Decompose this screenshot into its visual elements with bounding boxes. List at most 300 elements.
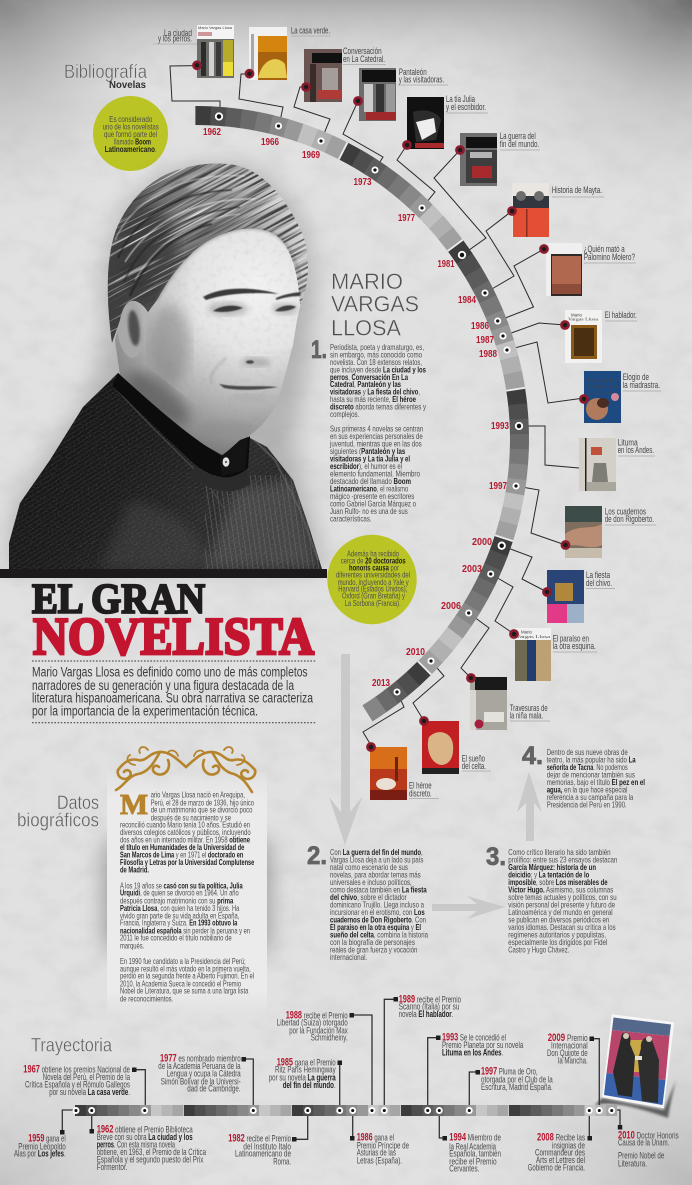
entry: 1962: Breve con su obra La ciudad y los	[97, 1132, 193, 1142]
entry: 1962: 1962 obtiene el Premio Biblioteca	[97, 1124, 193, 1136]
entry: 1989: Scanno (Italia) por su	[399, 1001, 459, 1011]
book: ¿Quién mató a Palomino Molero?	[540, 243, 636, 296]
text block 1: biography as novelist: visitadoras y La tía Julia y el	[330, 454, 410, 464]
book: El héroe discreto: discreto.	[409, 789, 432, 799]
book: El héroe discreto	[367, 743, 439, 800]
biography text: de Madrid.	[120, 865, 149, 875]
book: El hablador: Mario	[571, 312, 583, 318]
biography text	[120, 790, 254, 1003]
book: La guerra del fin del mundo: fin del mundo.	[500, 139, 539, 149]
intro paragraph: literatura hispanoamericana. Su obra narrativa se caracteriza	[32, 691, 313, 706]
arc timeline year labels: 2013	[372, 678, 390, 689]
entry: 2008: 2008 Recibe las	[537, 1132, 585, 1144]
text block 2: La guerra del fin del mundo: internacional.	[330, 952, 367, 962]
book: Historia de Mayta	[508, 183, 604, 237]
portrait photo of Mario Vargas Llosa	[0, 154, 330, 580]
callout: honoris causa doctorates	[327, 535, 417, 624]
text block 4: theatre and memoirs: memorias, bajo el título El pez en el	[547, 777, 645, 787]
entry: 1994: recibe el Premio	[449, 1156, 497, 1166]
arc timeline year labels: 1969	[302, 150, 320, 161]
text block 2: La guerra del fin del mundo: con la biografía de personajes	[330, 937, 415, 947]
entry: 1962	[97, 1124, 206, 1172]
text block 1: biography as novelist: en sus experiencias personales de	[330, 431, 423, 441]
book: ¿Quién mató a Palomino Molero?: ¿Quién mató a	[584, 244, 625, 254]
entry: 2009: Internacional	[551, 1041, 588, 1051]
entry: 1988: por la Fundación Max	[289, 1025, 348, 1035]
trayectoria entries	[14, 993, 679, 1174]
text block 1: biography as novelist: Latinoamericano, el realismo	[330, 484, 408, 494]
entry: 1977	[158, 1053, 241, 1094]
book: La guerra del fin del mundo	[456, 131, 540, 186]
text block 3: critic and essayist: 3.	[486, 843, 506, 871]
entry: 1997: 1997 Pluma de Oro,	[481, 1066, 538, 1078]
book: La ciudad y los perros: La ciudad	[164, 28, 192, 38]
arc timeline year labels: 1984	[458, 295, 476, 306]
ear	[114, 297, 146, 359]
text block 2: La guerra del fin del mundo: como destaca también en La fiesta	[330, 884, 427, 894]
photo halo shadow	[6, 165, 324, 569]
text block 4: theatre and memoirs: señorita de Tacna. No podemos	[547, 762, 628, 772]
book: La ciudad y los perros: y los perros.	[158, 34, 192, 44]
biography text: Filosofía y Letras por la Universidad Complutense	[120, 857, 254, 867]
entry: 1993	[442, 1032, 523, 1058]
callout: Boom Latinoamericano: que formó parte del	[104, 129, 157, 139]
callout: honoris causa doctorates: Oxford (Gran Bretaña) y	[342, 591, 405, 601]
book: Elogio de la madrastra: la madrastra.	[623, 380, 660, 390]
text block 1: biography as novelist: visitadoras y La fiesta del chivo,	[330, 387, 420, 397]
entry: 2010: Premio Nobel de	[618, 1151, 664, 1161]
arc timeline year labels: 1962	[203, 127, 221, 138]
text block 4: theatre and memoirs: dejar de mencionar también sus	[547, 770, 635, 780]
book: Historia de Mayta: Historia de Mayta.	[552, 185, 602, 195]
callout: honoris causa doctorates: diferentes universidades del	[336, 570, 410, 580]
book: La guerra del fin del mundo: La guerra del	[500, 131, 536, 141]
book: La tía Julia y el escribidor	[403, 94, 488, 149]
entry: 1988: 1988 recibe el Premio	[286, 1009, 348, 1021]
biography text: reconcilió cuando Mario tenía 10 años. Estudió en	[120, 820, 250, 830]
novel connector lines	[170, 66, 584, 747]
arc timeline band	[0, 0, 653, 896]
heading: Datos biográficos: Datos	[57, 793, 99, 814]
biography text: 2011 le fue concedido el título nobiliario de	[120, 933, 232, 943]
heading: Bibliografía: Novelas	[109, 80, 146, 91]
entry: 1985: 1985 gana el Premio	[277, 1056, 336, 1068]
entry: 2008: Commandeur des	[535, 1148, 585, 1158]
arc timeline year labels: 1981	[438, 259, 455, 270]
arc timeline year labels: 1973	[354, 177, 372, 188]
biography text: dos años en un internado militar. En 1958 obtiene	[120, 835, 250, 845]
entry: 2008: Gobierno de Francia.	[528, 1163, 585, 1173]
entry: 1959: 1959 gana el	[28, 1133, 66, 1145]
entry: 1986: 1986 gana el	[357, 1132, 394, 1144]
book: El sueño del celta	[420, 717, 491, 774]
text block 1: biography as novelist: Catedral, Pantaleón y las	[330, 379, 401, 389]
text block 1: biography as novelist	[311, 336, 426, 524]
book: Travesuras de la niña mala	[467, 674, 550, 730]
text block 3: critic and essayist: varios idiomas. Destacan su crítica a los	[508, 922, 616, 932]
award photo with curled shadow	[594, 1014, 676, 1118]
text block 1: biography as novelist: discreto aborda temas diferentes y	[330, 402, 426, 412]
biography text: Nobel de Literatura, que se suma a una larga lista	[120, 986, 248, 996]
text block 1: biography as novelist: como Gabriel García Márquez o	[330, 499, 416, 509]
biography text: Francia, Inglaterra y Suiza. En 1993 obtuvo la	[120, 918, 237, 928]
book: El paraíso en la otra esquina: la otra esquina.	[553, 641, 596, 651]
book: Elogio de la madrastra: MARIO	[586, 378, 620, 383]
entry: 1985	[269, 1056, 336, 1090]
callout: Boom Latinoamericano: Es considerado	[109, 114, 152, 124]
book: La tía Julia y el escribidor: y el escribidor.	[446, 102, 486, 112]
book: Elogio de la madrastra: LLOSA	[588, 390, 613, 395]
heading: name: LLOSA	[331, 316, 401, 341]
biography text: después de su nacimiento y se	[151, 813, 231, 823]
book: Lituma en los Andes	[579, 438, 655, 491]
book: El paraíso en la otra esquina	[510, 628, 597, 681]
book: Travesuras de la niña mala: Travesuras de	[510, 703, 548, 713]
arc timeline year labels: 2003	[462, 564, 483, 575]
text block 3: critic and essayist: sobre temas actuales y políticos, con su	[508, 892, 617, 902]
book: Elogio de la madrastra	[580, 371, 661, 423]
text block 2: La guerra del fin del mundo: novelas, para abordar temas más	[330, 870, 421, 880]
text block 4: theatre and memoirs: 4.	[522, 742, 543, 770]
entry: 1994: Cervantes.	[449, 1164, 479, 1174]
text block 1: biography as novelist: Juan Rulfo- no es una de sus	[330, 506, 408, 516]
heading: Datos biográficos	[17, 793, 99, 832]
entry: 1989: 1989 recibe el Premio	[399, 993, 461, 1005]
title: EL GRAN	[32, 577, 205, 623]
text block 4: theatre and memoirs	[522, 742, 645, 810]
book: El paraíso en la otra esquina: El paraíso en	[553, 634, 589, 644]
text block 3: critic and essayist: deicidio; y La tentación de lo	[508, 870, 589, 880]
turtleneck collar and button	[112, 373, 250, 491]
heading: Trayectoria: Trayectoria	[31, 1036, 112, 1057]
text block 2: La guerra del fin del mundo: reales de gran fuerza y vocación	[330, 944, 417, 954]
panel: biographical paper	[105, 747, 269, 1015]
entry: 1997	[481, 1066, 553, 1092]
arrow: right to block 3	[432, 896, 505, 919]
entry: 2008	[528, 1132, 585, 1173]
title	[32, 577, 314, 666]
entry: 2009	[547, 1032, 588, 1066]
book: La fiesta del chivo: La fiesta	[586, 570, 610, 580]
entry: 1962: perros. Con esta misma novela	[97, 1140, 175, 1150]
text block 2: La guerra del fin del mundo: incursionar en el erotismo, con Los	[330, 907, 425, 917]
neck and face	[115, 228, 301, 455]
entry: 1986: Asturias de las	[357, 1148, 396, 1158]
entry: 1962: Española y el segundo puesto del Prix	[97, 1155, 204, 1165]
arc timeline year labels: 1987	[476, 335, 494, 346]
text block 4: theatre and memoirs: referencia a su campaña para la	[547, 792, 634, 802]
book: El héroe discreto: El héroe	[409, 781, 432, 791]
entry: 1967	[23, 1063, 130, 1097]
callout: Boom Latinoamericano: llamado Boom	[114, 136, 151, 146]
text block 3: critic and essayist: imposible, sobre Los miserables de	[508, 877, 608, 887]
sweater	[0, 370, 330, 570]
heading: name: MARIO	[331, 269, 403, 294]
heading: name	[331, 269, 419, 341]
text block 1: biography as novelist: complejos.	[330, 409, 359, 419]
biography text: el título en Humanidades de la Universidad de	[120, 842, 244, 852]
callout: Boom Latinoamericano: Latinoamericano.	[105, 144, 157, 154]
ornament: gold flourish	[116, 747, 255, 792]
arrow: up to block 4	[517, 772, 542, 841]
text block 1: biography as novelist: Periodista, poeta y dramaturgo, es,	[330, 342, 424, 352]
black bar under portrait	[0, 569, 327, 578]
book: El paraíso en la otra esquina: Vargas Llosa	[516, 634, 550, 639]
text block 2: La guerra del fin del mundo: natal como escenario de sus	[330, 862, 408, 872]
callout: honoris causa doctorates: La Sorbona (Francia).	[345, 598, 401, 608]
book: Elogio de la madrastra: VARGAS	[586, 384, 620, 389]
book: Lituma en los Andes: en los Andes.	[618, 445, 654, 455]
entry: 1982: 1982 recibe el Premio	[228, 1133, 291, 1145]
book: El sueño del celta: El sueño	[462, 754, 485, 764]
text block 3: critic and essayist: regímenes autoritarios y populistas,	[508, 930, 606, 940]
entry: 1962: Formentor.	[97, 1162, 127, 1172]
entry: 2008: Arts et Lettres del	[536, 1155, 585, 1165]
text block 3: critic and essayist: Latinoamérica y del mundo en general	[508, 907, 613, 917]
text block 2: La guerra del fin del mundo: universales e incluso políticos,	[330, 877, 412, 887]
text block 1: biography as novelist: mágico -presente en escritores	[330, 491, 414, 501]
text block 3: critic and essayist: Como crítico literario ha sido también	[508, 847, 611, 857]
book: ¿Quién mató a Palomino Molero?: Palomino Molero?	[584, 252, 635, 262]
arc timeline year labels: 2010	[406, 647, 425, 658]
text block 2: La guerra del fin del mundo: Con La guerra del fin del mundo,	[330, 847, 423, 857]
entry: 1986	[357, 1132, 409, 1165]
text block 2: La guerra del fin del mundo: del chivo, sobre el dictador	[330, 892, 407, 902]
text block 1: biography as novelist: destacado del llamado Boom	[330, 476, 411, 486]
arrow: down to block 2	[329, 654, 362, 845]
career timeline connectors	[62, 999, 620, 1139]
text block 2: La guerra del fin del mundo: Vargas Llosa deja a un lado su país	[330, 854, 423, 864]
book: El hablador: El hablador.	[605, 310, 637, 320]
heading: Bibliografía: Bibliografía	[64, 62, 147, 83]
biography text: A los 19 años se casó con su tía política, Julia	[120, 880, 243, 890]
entry: 1986: Premio Príncipe de	[357, 1140, 409, 1150]
entry: 2009: Don Quijote de	[547, 1048, 588, 1058]
drop cap: M	[120, 789, 148, 821]
text block 1: biography as novelist: juventud, mientras que en las dos	[329, 439, 422, 449]
callout: honoris causa doctorates: mundo, incluyendo a Yale y	[338, 577, 409, 587]
biography text: después contrajo matrimonio con su prima	[120, 895, 233, 905]
entry: 1989: novela El hablador.	[399, 1009, 453, 1019]
title: NOVELISTA	[33, 608, 314, 666]
callout: honoris causa doctorates: cerca de 20 doctorados	[341, 556, 406, 566]
text block 1: biography as novelist: perros, Conversación En La	[330, 372, 408, 382]
biography text: de reconocimientos.	[120, 993, 173, 1003]
entry: 1977: 1977 es nombrado miembro	[160, 1053, 241, 1065]
text block 4: theatre and memoirs: agua, en la que hace especial	[547, 784, 627, 794]
arc timeline year labels: 1977	[398, 213, 415, 224]
entry: 1959: Alas por Los jefes.	[14, 1149, 66, 1159]
entry: 1993: 1993 Se le concedió el	[442, 1032, 506, 1044]
entry: 1959: Premio Leopoldo	[18, 1141, 66, 1151]
text block 3: critic and essayist: Víctor Hugo. Asimismo, sus columnas	[508, 884, 613, 894]
text block 2: La guerra del fin del mundo: cuadernos de Don Rigoberto. Con	[330, 914, 426, 924]
book: El hablador	[561, 310, 637, 363]
entry: 1985: Ritz París Hemingway	[275, 1065, 336, 1075]
book: Los cuadernos de don Rigoberto	[562, 506, 656, 558]
entry: 1993: Premio Planeta por su novela	[442, 1040, 523, 1050]
callout: Boom Latinoamericano: uno de los novelistas	[103, 122, 159, 132]
entry: 1997: Escritura, Madrid España.	[481, 1082, 553, 1092]
entry: 1982: Roma.	[273, 1156, 291, 1166]
arc timeline dots	[216, 113, 522, 695]
text block 4: theatre and memoirs: Dentro de sus nueve obras de	[547, 747, 628, 757]
entry: 1977: de la Academia Peruana de la	[158, 1061, 241, 1071]
arc timeline year labels: 1997	[489, 481, 507, 492]
arc timeline year labels: 2006	[441, 601, 462, 612]
text block 1: biography as novelist: características.	[330, 514, 372, 524]
entry: 1997: otorgada por el Club de la	[481, 1074, 553, 1084]
text block 2: La guerra del fin del mundo: dominicano Trujillo. Llega incluso a	[330, 900, 424, 910]
entry: 2008: insignias de	[552, 1140, 585, 1150]
callout: honoris causa doctorates: honoris causa por	[349, 563, 399, 573]
book: Pantaleón y las visitadoras: Pantaleón	[399, 67, 427, 77]
text block 4: theatre and memoirs: teatro, la más popular ha sido La	[547, 754, 636, 764]
biography text: nacionalidad española sin perder la peruana y en	[120, 925, 250, 935]
arc timeline year labels: 1988	[479, 349, 497, 360]
book: La ciudad y los perros: Mario Vargas Llosa	[198, 26, 232, 30]
heading: Bibliografía	[64, 62, 147, 91]
book: El hablador: Vargas Llosa	[568, 316, 598, 322]
biography text: En 1990 fue candidato a la Presidencia del Perú;	[120, 956, 246, 966]
entry: 1994: la Real Academia	[449, 1141, 496, 1151]
facial features	[203, 289, 301, 390]
book: La tía Julia y el escribidor: La tía Julia	[446, 94, 475, 104]
text block 1: biography as novelist: novelista. Con 18 extensos relatos,	[330, 357, 422, 367]
entry: 1967: Crítica Española y el Rómulo Gallegos	[25, 1080, 130, 1090]
heading: Datos biográficos: biográficos	[17, 811, 99, 832]
book: La fiesta del chivo: del chivo.	[586, 578, 612, 588]
heading: name: VARGAS	[331, 292, 419, 317]
entry: 1985: del fin del mundo.	[283, 1080, 336, 1090]
book: La casa verde: La casa verde.	[291, 26, 330, 36]
biography text: marqués.	[120, 940, 144, 950]
entry: 1993: Lituma en los Andes.	[442, 1048, 503, 1058]
book: El paraíso en la otra esquina: Mario	[521, 630, 533, 634]
text block 3: critic and essayist: García Márquez: historia de un	[508, 862, 596, 872]
text block 3: critic and essayist: prolífico: entre sus 23 ensayos destacan	[508, 854, 617, 864]
biography text: perdió en la segunda frente a Alberto Fujimori. En el	[120, 971, 254, 981]
book: Conversación en La Catedral	[302, 46, 386, 102]
entry: 1977: dad de Cambridge.	[187, 1084, 241, 1094]
book: Conversación en La Catedral: Conversación	[343, 46, 382, 56]
entry: 2009: 2009 Premio	[548, 1032, 588, 1044]
entry: 2010	[618, 1129, 679, 1168]
career timeline band	[75, 1105, 617, 1116]
entry: 1977: Lengua y ocupa la Cátedra	[167, 1069, 241, 1079]
book: El sueño del celta: del celta.	[462, 761, 486, 771]
intro paragraph: narradores de su generación y una figura destacada de la	[32, 678, 294, 693]
entry: 1977: Simón Bolívar de la Universi-	[161, 1076, 241, 1086]
callout: Boom Latinoamericano	[93, 96, 168, 171]
entry: 1967: por su novela La casa verde.	[49, 1087, 130, 1097]
entry: 1982	[228, 1133, 291, 1166]
biography text: Urquidi, de quien se divorció en 1964. Un año	[120, 888, 239, 898]
entry: 1985: por su novela La guerra	[269, 1072, 336, 1082]
arc timeline year labels: 1986	[471, 321, 489, 332]
text block 2: La guerra del fin del mundo: El paraíso en la otra esquina y El	[330, 922, 421, 932]
career timeline dots	[74, 1108, 614, 1113]
entry: 1989	[399, 993, 461, 1019]
arc timeline year labels: 1966	[261, 137, 279, 148]
book: Pantaleón y las visitadoras: y las visitadoras.	[399, 74, 444, 84]
callout: honoris causa doctorates: Además ha recibido	[347, 549, 399, 559]
entry: 1988	[277, 1009, 348, 1043]
book: Conversación en La Catedral: en La Catedral.	[343, 54, 385, 64]
biography text: diversos colegios católicos y públicos, incluyendo	[120, 827, 251, 837]
text block 1: biography as novelist: elemento fundamental. Miembro	[330, 469, 420, 479]
career timeline square markers	[60, 997, 622, 1142]
biography text: Perú, el 28 de marzo de 1936, hijo único	[151, 797, 254, 807]
entry: 1959	[14, 1133, 66, 1159]
biography text: aunque resultó el más votado en la primera vuelta,	[120, 963, 251, 973]
book: La ciudad y los perros	[153, 25, 234, 78]
text block 2: La guerra del fin del mundo: 2.	[307, 842, 327, 870]
text block 3: critic and essayist: especialmente los dirigidos por Fidel	[508, 937, 607, 947]
text block 3: critic and essayist	[486, 843, 617, 954]
text block 1: biography as novelist: 1.	[311, 336, 327, 364]
book: La fiesta del chivo	[543, 570, 615, 623]
intro paragraph	[32, 661, 316, 723]
entry: 1982: del Instituto Italo	[243, 1141, 291, 1151]
book: Los cuadernos de don Rigoberto: Los cuadernos	[605, 507, 646, 517]
text block 1: biography as novelist: Sus primeras 4 novelas se centran	[330, 424, 423, 434]
entry: 1988: Schmidheiny.	[311, 1033, 348, 1043]
biography text: de un matrimonio que se divorció poco	[151, 805, 253, 815]
text block 1: biography as novelist: escribidor), el humor es el	[330, 461, 402, 471]
face shading	[119, 302, 298, 435]
book: Los cuadernos de don Rigoberto: de don Rigoberto.	[605, 514, 654, 524]
text block 2: La guerra del fin del mundo: sueño del celta, combina la historia	[330, 930, 428, 940]
intro paragraph: Mario Vargas Llosa es definido como uno de más completos	[32, 665, 308, 680]
arc timeline year labels	[203, 127, 509, 689]
text block 1: biography as novelist: sin embargo, más conocido como	[330, 349, 422, 359]
entry: 1988: Libertad (Suiza) otorgado	[277, 1018, 348, 1028]
entry: 1982: Latinoamericano de	[235, 1149, 291, 1159]
entry: 1994	[449, 1132, 501, 1174]
entry: 1967: Novela del Perú, el Premio de la	[43, 1072, 130, 1082]
entry: 1962: obtiene, en 1963, el Premio de la Crítica	[97, 1147, 206, 1157]
entry: 2010: Literatura.	[618, 1158, 647, 1168]
entry: 1986: Letras (España).	[357, 1155, 402, 1165]
intro paragraph: por la importancia de la experimentación técnica.	[32, 704, 258, 719]
text block 2: La guerra del fin del mundo	[307, 842, 428, 962]
hair	[108, 164, 308, 343]
text block 4: theatre and memoirs: Presidencia del Perú en 1990.	[547, 800, 627, 810]
biography text: Patricia Llosa, con quien ha tenido 3 hijos. Ha	[120, 903, 239, 913]
text block 3: critic and essayist: visión personal del presente y futuro de	[508, 900, 615, 910]
text block 1: biography as novelist: hasta su más reciente, El héroe	[330, 394, 416, 404]
biography text: ario Vargas Llosa nació en Arequipa,	[151, 790, 245, 800]
entry: 1994: 1994 Miembro de	[449, 1132, 501, 1144]
book: Travesuras de la niña mala: la niña mala.	[510, 711, 543, 721]
biography text: 2010, la Academia Sueca le concedió el Premio	[120, 978, 241, 988]
text block 3: critic and essayist: se publican en diversos periódicos en	[508, 914, 609, 924]
text block 1: biography as novelist: que incluyen desde La ciudad y los	[330, 364, 426, 374]
arc timeline year labels: 2000	[472, 537, 493, 548]
panel shadow	[105, 840, 269, 950]
book: Elogio de la madrastra: Elogio de	[623, 372, 649, 382]
arc timeline year labels: 1993	[491, 421, 509, 432]
book: Lituma en los Andes: Lituma	[618, 438, 638, 448]
book: La casa verde	[246, 26, 331, 80]
text block 3: critic and essayist: Castro y Hugo Chávez.	[508, 944, 569, 954]
biography text: San Marcos de Lima y en 1971 el doctorado en	[120, 850, 243, 860]
text block 1: biography as novelist: siguientes (Pantaleón y las	[330, 446, 405, 456]
callout: honoris causa doctorates: Harvard (Estados Unidos),	[338, 584, 407, 594]
biography text: vivido gran parte de su vida adulta en España,	[120, 910, 239, 920]
entry: 1994: Española, también	[449, 1149, 501, 1159]
